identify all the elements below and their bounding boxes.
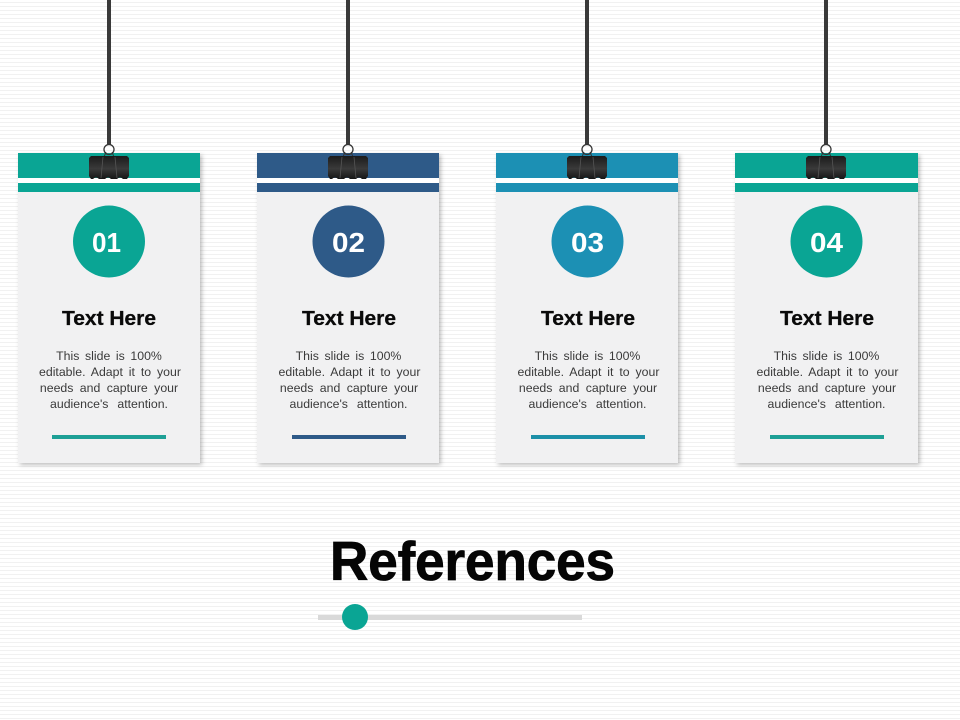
body text: audience's attention.	[290, 397, 407, 411]
icon: binder clip	[89, 144, 129, 179]
card header band	[18, 153, 200, 192]
hanging cord	[346, 0, 350, 145]
slider decoration	[318, 604, 582, 630]
number badge 01: 01	[92, 227, 121, 258]
accent bar	[52, 435, 166, 439]
body text: This slide is 100%	[56, 349, 162, 363]
panel: card 03	[496, 0, 678, 463]
number badge 03: 03	[571, 227, 604, 258]
icon: binder clip	[806, 144, 846, 179]
body text: needs and capture your	[758, 381, 896, 395]
number badge 02: 02	[332, 227, 365, 258]
card body	[496, 153, 678, 463]
body text: editable. Adapt it to your	[757, 365, 898, 379]
panel: card 02	[257, 0, 439, 463]
body text: audience's attention.	[529, 397, 646, 411]
hanging cord	[107, 0, 111, 145]
body text: needs and capture your	[280, 381, 418, 395]
icon: binder clip	[328, 144, 368, 179]
body text: This slide is 100%	[296, 349, 401, 363]
heading: Text Here	[541, 308, 635, 330]
title: References	[330, 531, 615, 592]
accent bar	[292, 435, 406, 439]
heading: Text Here	[302, 308, 396, 330]
card header band	[257, 153, 439, 192]
body text: editable. Adapt it to your	[39, 365, 181, 379]
number badge 03	[552, 206, 624, 278]
body text: needs and capture your	[519, 381, 657, 395]
heading: Text Here	[780, 308, 874, 330]
body text: editable. Adapt it to your	[279, 365, 420, 379]
card body	[18, 153, 200, 463]
number badge 04: 04	[810, 227, 843, 258]
body text	[518, 349, 659, 411]
hanging cord	[824, 0, 828, 145]
accent bar	[770, 435, 884, 439]
card body	[735, 153, 918, 463]
card body	[257, 153, 439, 463]
body text: audience's attention.	[50, 397, 168, 411]
card header band	[735, 153, 918, 192]
body text: audience's attention.	[768, 397, 885, 411]
number badge 01	[73, 206, 145, 278]
body text: This slide is 100%	[535, 349, 640, 363]
body text: needs and capture your	[40, 381, 178, 395]
card header band	[496, 153, 678, 192]
number badge 02	[312, 206, 384, 278]
body text: This slide is 100%	[774, 349, 879, 363]
body text	[757, 349, 898, 411]
icon: binder clip	[567, 144, 607, 179]
body text	[39, 349, 181, 411]
number badge 04	[790, 206, 862, 278]
body text: editable. Adapt it to your	[518, 365, 659, 379]
body text	[279, 349, 420, 411]
accent bar	[531, 435, 645, 439]
panel: card 04	[735, 0, 918, 463]
heading: Text Here	[62, 308, 156, 330]
panel: card 01	[18, 0, 200, 463]
hanging cord	[585, 0, 589, 145]
